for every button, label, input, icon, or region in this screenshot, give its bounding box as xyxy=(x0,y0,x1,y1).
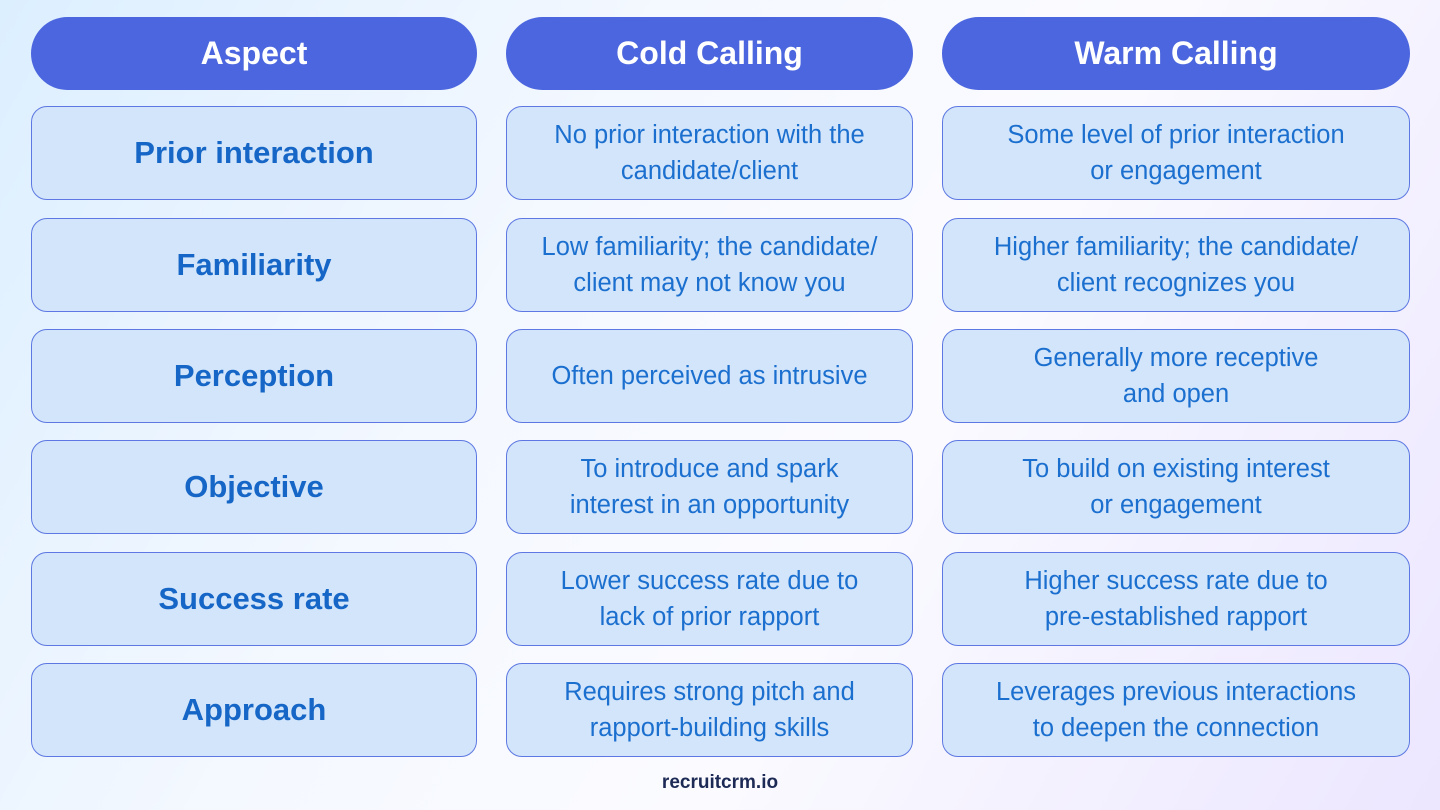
cold cell: No prior interaction with the xyxy=(554,121,865,149)
warm cell: Some level of prior interaction xyxy=(1007,121,1345,149)
header: Warm Calling: Warm Calling xyxy=(1074,35,1278,71)
warm cell xyxy=(942,106,1410,200)
warm cell xyxy=(942,663,1410,757)
cold cell xyxy=(506,552,913,646)
warm cell: Higher familiarity; the candidate/ xyxy=(994,233,1358,261)
aspect cell: Familiarity xyxy=(176,247,332,282)
aspect cell xyxy=(31,329,477,423)
aspect cell: Prior interaction xyxy=(134,135,374,170)
warm cell: pre-established rapport xyxy=(1045,603,1307,631)
warm cell xyxy=(942,329,1410,423)
warm cell: to deepen the connection xyxy=(1033,714,1319,742)
row: Objective xyxy=(31,440,1410,534)
warm cell: client recognizes you xyxy=(1057,269,1295,297)
cold cell xyxy=(506,329,913,423)
warm cell: Higher success rate due to xyxy=(1024,567,1328,595)
aspect cell xyxy=(31,552,477,646)
row: Success rate xyxy=(31,552,1410,646)
cold cell: To introduce and spark xyxy=(580,455,838,483)
row: Prior interaction xyxy=(31,106,1410,200)
cold cell: interest in an opportunity xyxy=(570,491,849,519)
cold cell: Low familiarity; the candidate/ xyxy=(542,233,877,261)
footer: brand: recruitcrm.io xyxy=(662,772,778,793)
row: Familiarity xyxy=(31,218,1410,312)
warm cell xyxy=(942,218,1410,312)
warm cell: To build on existing interest xyxy=(1022,455,1330,483)
header: Cold Calling xyxy=(506,17,913,90)
cold cell: client may not know you xyxy=(573,269,846,297)
cold cell: rapport-building skills xyxy=(590,714,829,742)
cold cell: Lower success rate due to xyxy=(561,567,858,595)
header: Warm Calling xyxy=(942,17,1410,90)
aspect cell: Success rate xyxy=(158,581,350,616)
warm cell xyxy=(942,440,1410,534)
header: Cold Calling: Cold Calling xyxy=(616,35,803,71)
aspect cell xyxy=(31,106,477,200)
warm cell: or engagement xyxy=(1090,491,1262,519)
cold cell xyxy=(506,106,913,200)
cold cell: Requires strong pitch and xyxy=(564,678,855,706)
aspect cell: Objective xyxy=(184,469,324,504)
warm cell: and open xyxy=(1123,380,1229,408)
cold cell xyxy=(506,218,913,312)
cold cell: candidate/client xyxy=(621,157,798,185)
row: Approach xyxy=(31,663,1410,757)
aspect cell: Perception xyxy=(174,358,334,393)
aspect cell xyxy=(31,218,477,312)
header: Aspect: Aspect xyxy=(201,35,307,71)
aspect cell: Approach xyxy=(182,692,326,727)
header: Aspect xyxy=(31,17,477,90)
warm cell: Leverages previous interactions xyxy=(996,678,1356,706)
warm cell: Generally more receptive xyxy=(1034,344,1318,372)
aspect cell xyxy=(31,440,477,534)
warm cell: or engagement xyxy=(1090,157,1262,185)
cold cell: lack of prior rapport xyxy=(600,603,819,631)
cold cell xyxy=(506,440,913,534)
cold cell xyxy=(506,663,913,757)
warm cell xyxy=(942,552,1410,646)
row: Perception xyxy=(31,329,1410,423)
cold cell: Often perceived as intrusive xyxy=(551,362,868,390)
aspect cell xyxy=(31,663,477,757)
